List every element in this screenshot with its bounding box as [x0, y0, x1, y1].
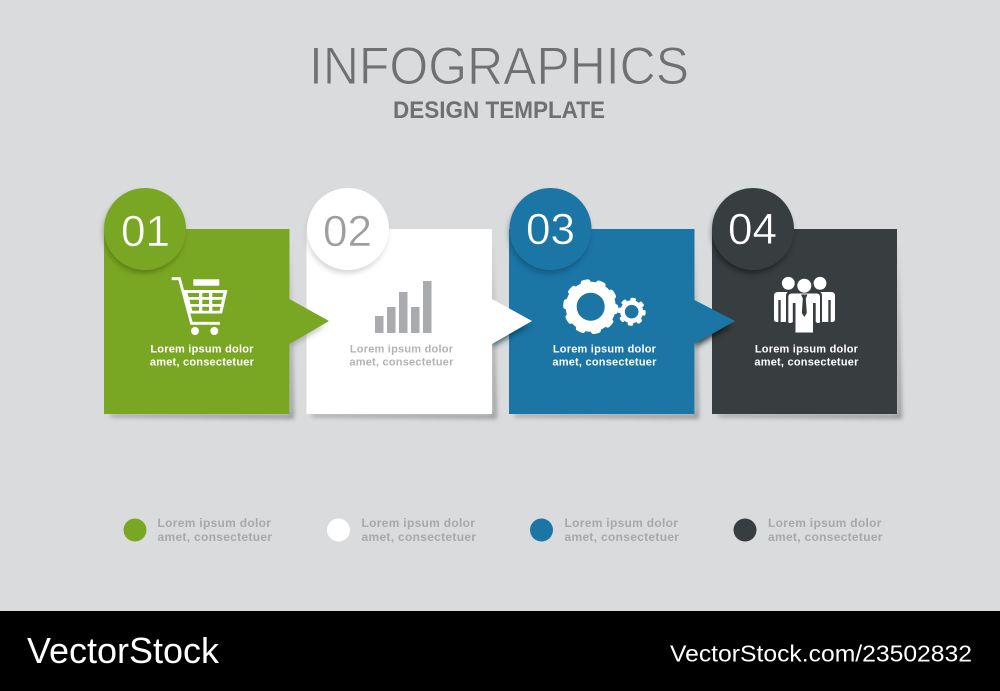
legend item 01 [124, 516, 272, 544]
icon: shopping cart [172, 279, 228, 335]
legend item 04 [734, 516, 883, 544]
legend item 04: Lorem ipsum dolor [768, 516, 882, 530]
legend item 03: amet, consectetuer [564, 530, 679, 544]
panel 01: shopping [104, 188, 329, 419]
label 02: Lorem ipsum dolor [350, 344, 454, 356]
panel 04: team [712, 188, 902, 419]
icon: bar chart [375, 281, 432, 333]
icon: business people [774, 277, 835, 334]
badge 04 [712, 188, 794, 270]
badge 03: 03 [526, 205, 575, 254]
footer bar [0, 611, 1000, 691]
label 02: amet, consectetuer [349, 356, 454, 368]
legend item 03 [530, 516, 679, 544]
legend item 02 [327, 516, 476, 544]
footer url: VectorStock.com/23502832 [670, 640, 972, 666]
panel 02: chart [306, 188, 532, 419]
label 01: Lorem ipsum dolor [150, 344, 254, 356]
legend item 01: amet, consectetuer [158, 530, 272, 544]
subtitle: DESIGN TEMPLATE [393, 97, 605, 124]
legend item 01: Lorem ipsum dolor [158, 516, 271, 530]
legend item 02: amet, consectetuer [362, 530, 476, 544]
title: INFOGRAPHICS [309, 37, 689, 96]
badge 03 [510, 188, 592, 270]
label 04: amet, consectetuer [754, 356, 859, 368]
badge 01 [104, 188, 186, 270]
footer logo: VectorStock [27, 630, 220, 671]
badge 02: 02 [323, 207, 372, 256]
icon: gears [566, 282, 644, 332]
label 01: amet, consectetuer [150, 356, 255, 368]
label 04: Lorem ipsum dolor [755, 344, 859, 356]
legend item 02: Lorem ipsum dolor [362, 516, 475, 530]
legend item 04: amet, consectetuer [768, 530, 883, 544]
badge 02 [307, 188, 389, 270]
legend [124, 516, 883, 544]
badge 04: 04 [728, 205, 777, 254]
badge 01: 01 [121, 207, 170, 256]
panel 03: settings [509, 188, 735, 419]
label 03: amet, consectetuer [552, 356, 657, 368]
label 03: Lorem ipsum dolor [553, 344, 657, 356]
legend item 03: Lorem ipsum dolor [564, 516, 678, 530]
